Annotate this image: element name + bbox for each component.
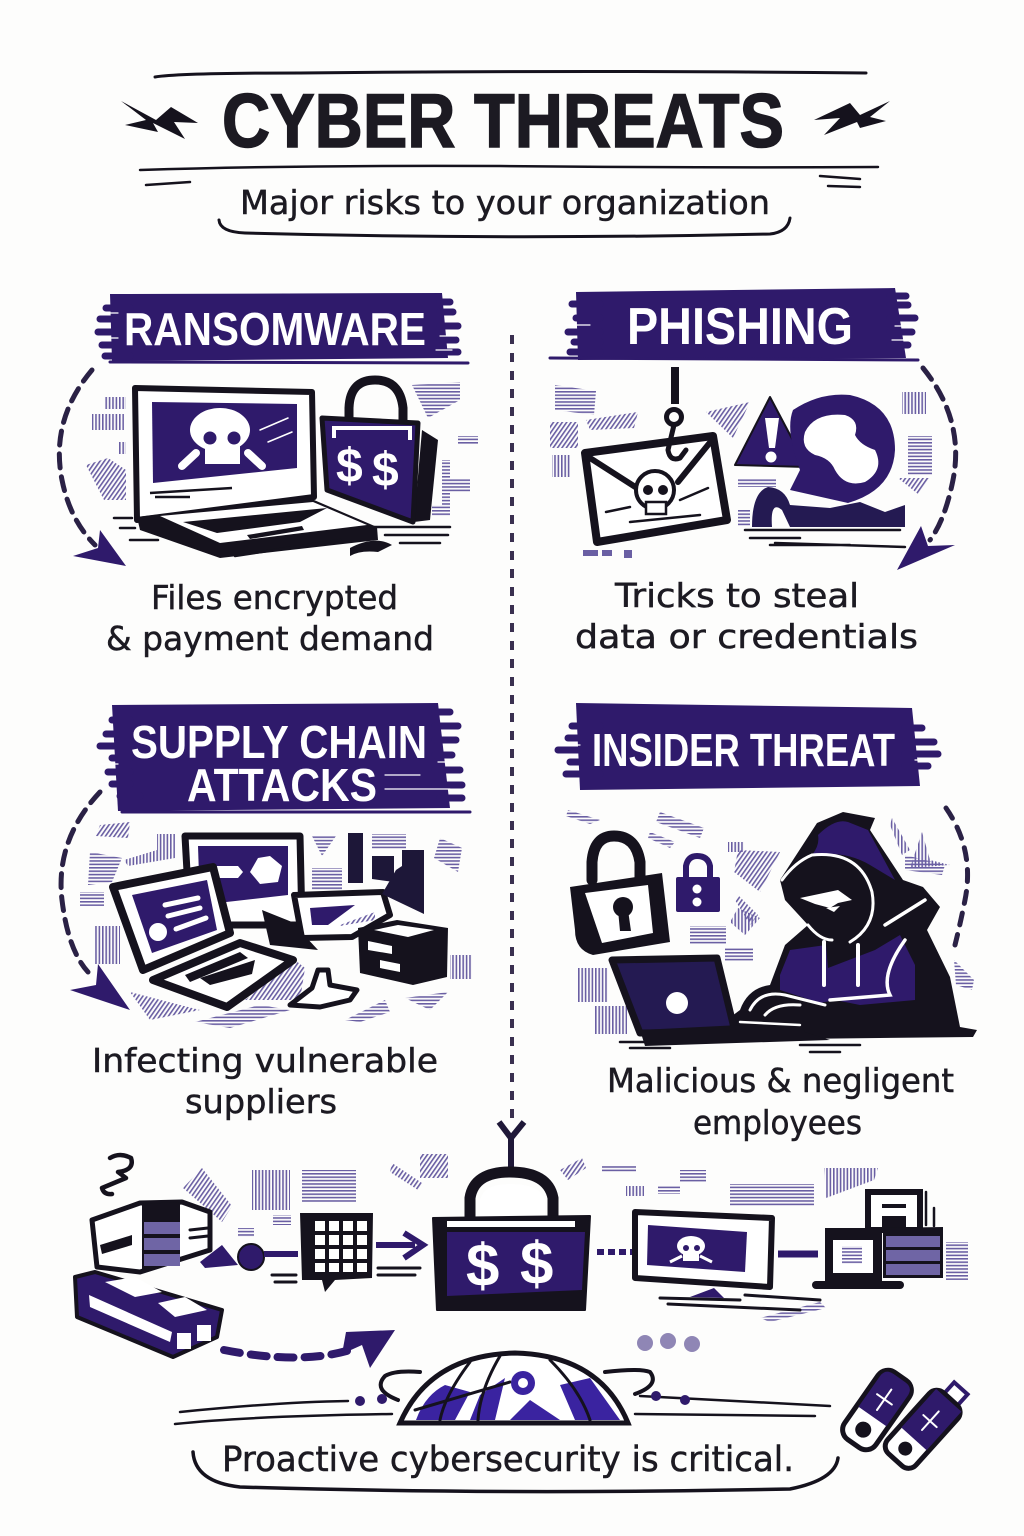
icon: central padlock with dollars [433,1172,590,1310]
icon: devices stack [816,1192,943,1285]
icon: central padlock with dollars: $ [520,1230,553,1297]
icon: back monitor [185,836,302,925]
panel: insider threat [558,703,977,1142]
subtitle: Major risks to your organization [240,183,770,222]
icon: small padlock [676,856,720,912]
panel: ransomware [59,293,478,658]
icon: folder documents [262,892,390,950]
icon: padlock with dollars [322,380,438,522]
arrow: dashed to globe [224,1330,395,1368]
text: ransomware description: Files encrypted [151,578,398,617]
arrow: supply chain dashed [61,792,130,1010]
icon: right lightning bolt [814,101,890,135]
text: supply chain description: suppliers [185,1082,337,1121]
text: ransomware description: & payment demand [106,619,434,658]
icon: dark circle figure [745,395,905,547]
banner: supply chain: ATTACKS [187,759,377,811]
banner: supply chain: SUPPLY CHAIN [131,716,427,768]
icon: scattered hatch texture [550,385,932,558]
arrow: grid to lock [376,1233,423,1258]
icon: padlock with dollars: $ [336,440,363,493]
icon: squiggle [102,1155,132,1194]
icon: laptop with skull [114,388,450,558]
title [140,72,878,187]
center dashed divider [510,335,514,1120]
arrow: insider dashed [946,808,968,945]
arrow: ransomware dashed [59,370,126,566]
closing statement: Proactive cybersecurity is critical. [222,1440,794,1480]
icon: buildings [348,833,424,914]
icon: padlock with dollars: $ [372,444,399,497]
icon: hatch texture [183,1154,968,1322]
banner: insider threat [558,703,938,790]
icon: scattered hatch texture [80,822,472,1028]
panel: attack chain strip [75,1154,968,1368]
icon: large padlock [570,836,670,955]
banner: insider threat: INSIDER THREAT [592,724,895,776]
text: insider description: Malicious & negligent [607,1061,954,1100]
icon: scattered hatch texture [86,382,478,516]
icon: central padlock with dollars: $ [466,1232,499,1299]
text: supply chain description: Infecting vulnerable [92,1041,438,1080]
icon: parcel upper [92,1202,210,1272]
arrow: lock to monitor [597,1249,632,1255]
icon: parcel box [358,920,448,985]
banner: phishing [550,288,918,360]
icon: monitor with skull [635,1212,820,1310]
text: phishing description: data or credentials [575,617,918,656]
banner: ransomware [98,293,468,363]
banner: supply chain [100,703,470,812]
icon: dots [637,1333,700,1352]
arrow: monitor to devices [778,1250,818,1258]
text: phishing description: Tricks to steal [614,576,859,615]
icon: warning triangle [735,397,807,467]
banner: phishing: PHISHING [627,298,853,356]
icon: grid chip [272,1213,420,1292]
icon: parcel lower [75,1272,222,1357]
text: insider description: employees [693,1103,862,1142]
icon: small figure stamp [290,970,357,1007]
title: CYBER THREATS [222,79,784,164]
subtitle [219,183,790,237]
icon: globe [175,1353,830,1424]
banner: ransomware: RANSOMWARE [124,303,426,355]
icon: usb drives [838,1366,974,1472]
panel: phishing [550,288,956,656]
icon: laptop [113,867,293,1007]
panel: supply chain attacks [61,703,472,1121]
arrow: connector to grid [200,1244,298,1270]
icon: hooded hacker at laptop [612,812,977,1052]
icon: scattered hatch texture [566,810,974,1034]
arrow: divider tip [499,1122,524,1172]
arrow: phishing dashed [897,368,956,570]
icon: left lightning bolt [121,101,198,139]
icon: envelope with skull and hook [585,367,727,542]
